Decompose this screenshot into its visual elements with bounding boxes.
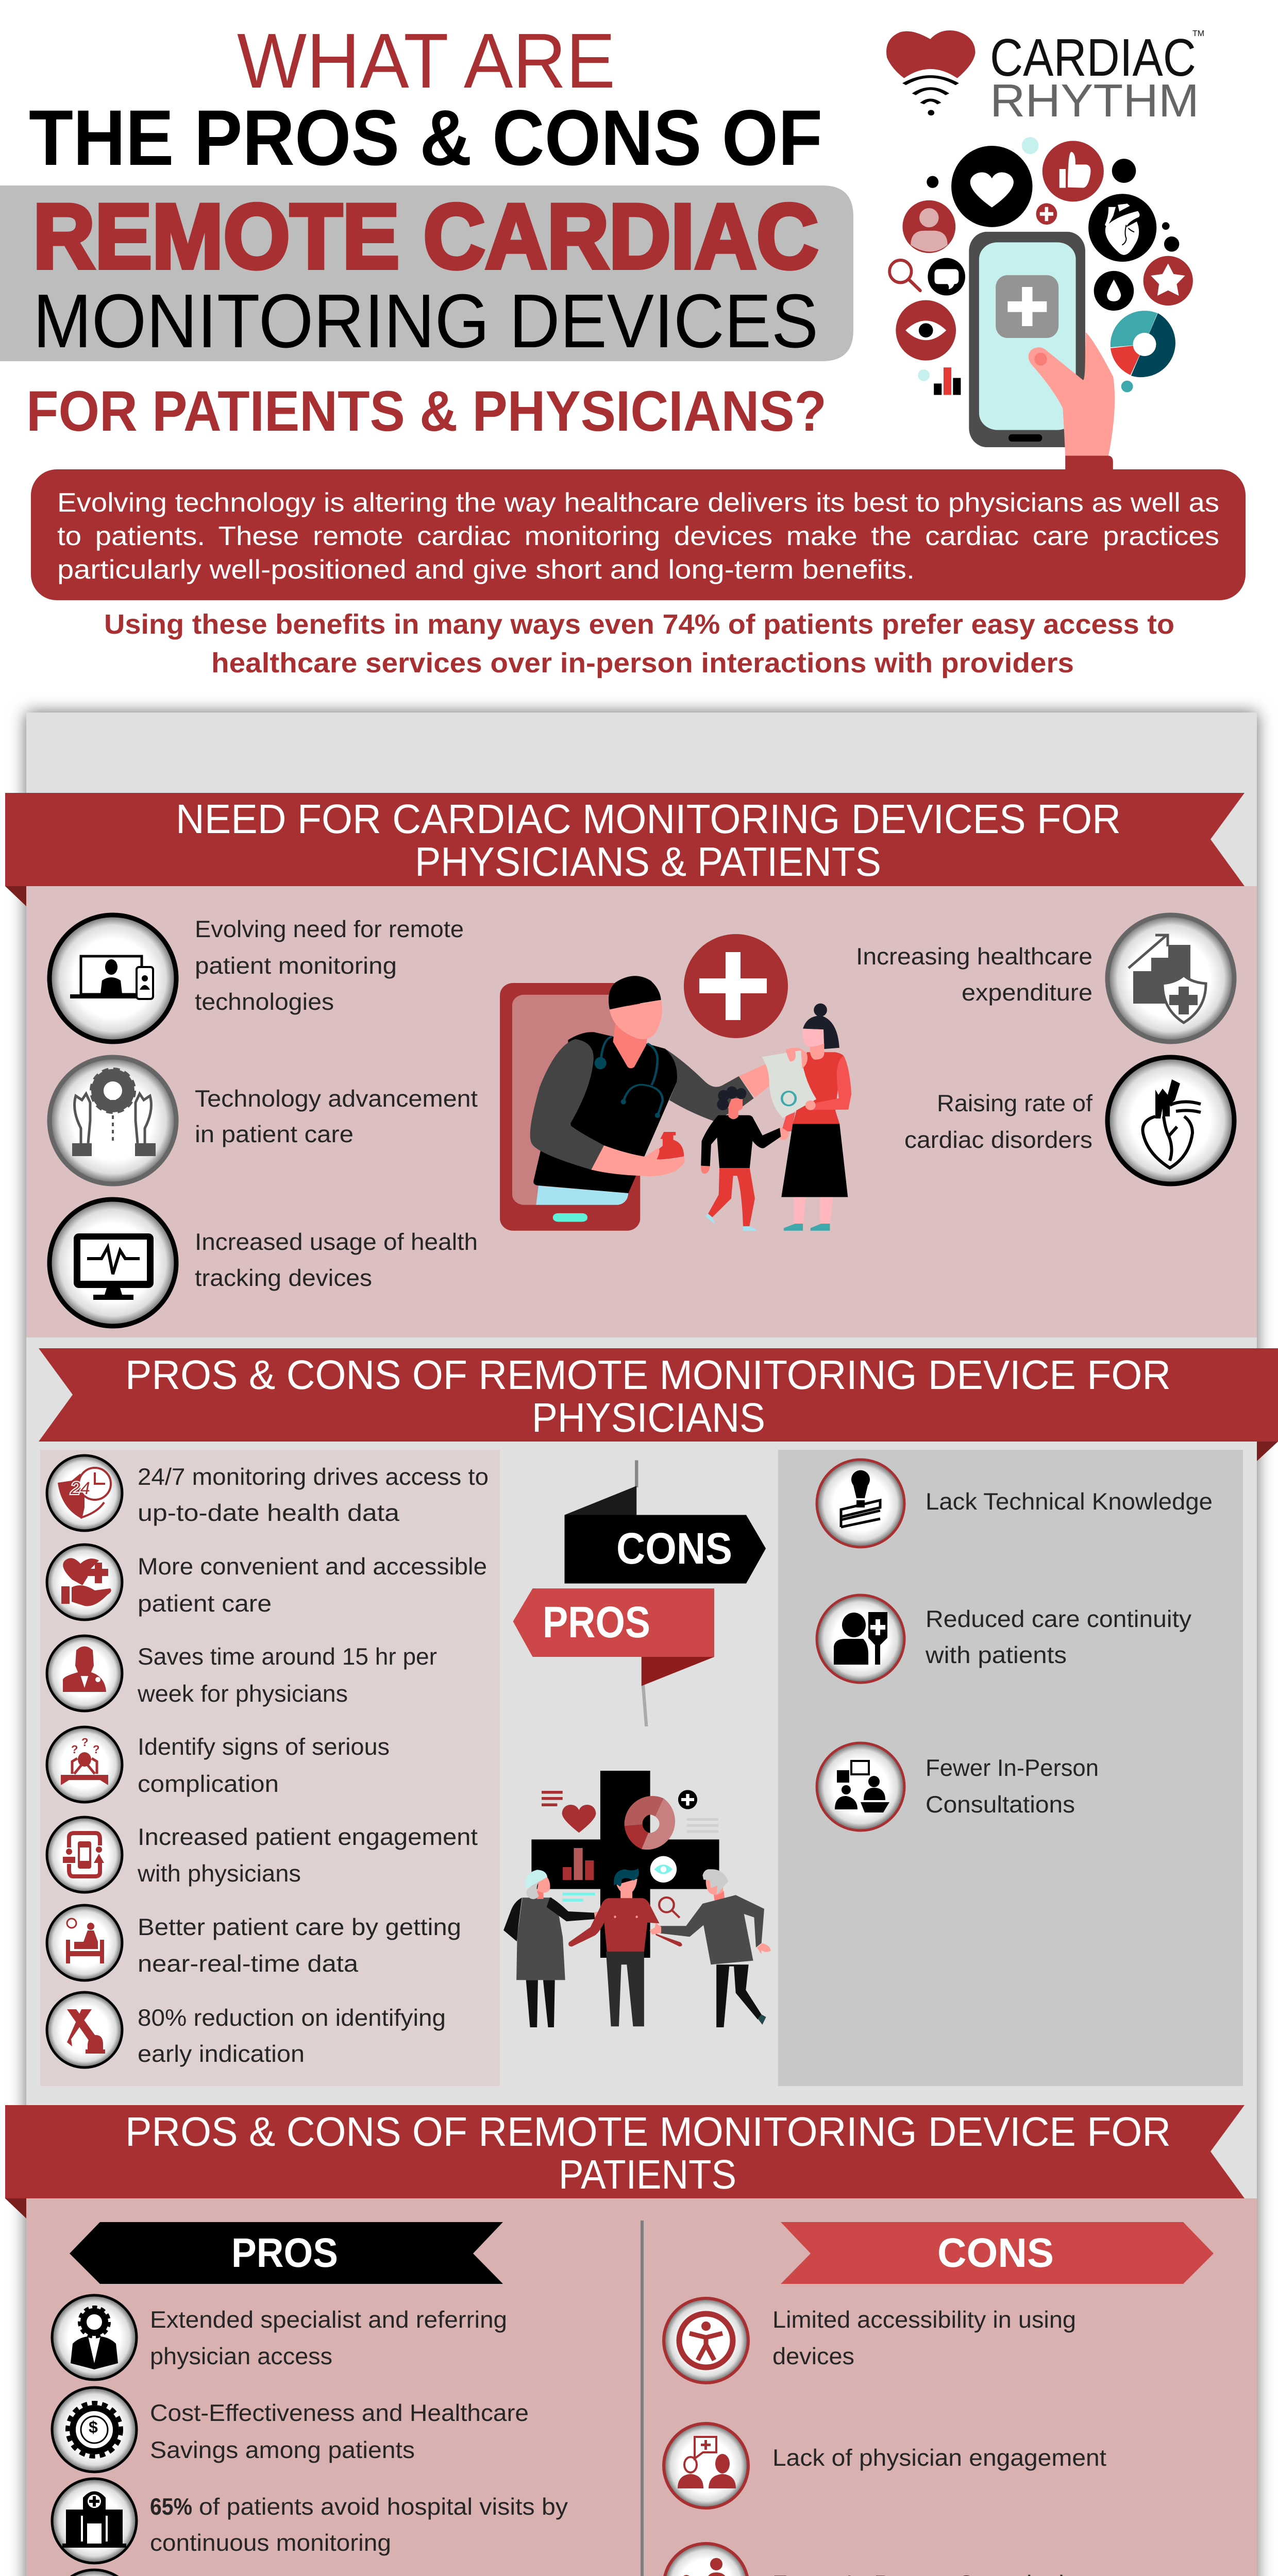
pro: early indication: 80% reduction on identifying <box>138 2004 446 2031</box>
patient con: limited accessibility: Limited accessibility in using <box>772 2306 1076 2333</box>
section banner: patients: PROS & CONS OF REMOTE MONITORING DEVICE FOR <box>125 2109 1171 2155</box>
need item: remote monitoring <box>49 915 464 1042</box>
arrow sign: cons and pros: CONS <box>616 1524 732 1573</box>
pro: near-real-time data: Better patient care by getting <box>138 1913 461 1940</box>
pro: 24/7 monitoring: 24/7 monitoring drives access to <box>138 1463 489 1490</box>
patient con: fewer in-person consultations <box>664 2544 1103 2576</box>
section banner: physicians <box>39 1348 1278 1461</box>
pro: near-real-time data <box>47 1905 461 1980</box>
section banner: need <box>5 793 1245 906</box>
patient pro: cost-effectiveness: $ <box>89 2418 98 2436</box>
patient pro: cost-effectiveness: Savings among patients <box>150 2436 415 2463</box>
con: reduced care continuity: Reduced care continuity <box>926 1605 1191 1632</box>
con: lack technical knowledge <box>817 1460 1213 1547</box>
logo: Cardiac Rhythm: RHYTHM <box>990 75 1199 127</box>
panel: need for cardiac monitoring devices <box>5 793 1257 1337</box>
cons ribbon: CONS <box>937 2230 1054 2276</box>
title: MONITORING DEVICES <box>33 279 818 364</box>
patient con: lack of physician engagement <box>664 2424 1106 2508</box>
intro panel <box>31 469 1246 600</box>
section banner: physicians: PROS & CONS OF REMOTE MONITORING DEVICE FOR <box>125 1352 1171 1398</box>
section banner: need: NEED FOR CARDIAC MONITORING DEVICES FOR <box>176 796 1121 842</box>
pro: near-real-time data: near-real-time data <box>138 1950 358 1977</box>
pro: saves time: Saves time around 15 hr per <box>138 1643 437 1670</box>
pros ribbon <box>70 2222 503 2284</box>
con: fewer in-person consultations: Consultations <box>926 1791 1075 1818</box>
pro: patient engagement: with physicians <box>137 1860 301 1887</box>
pro: patient engagement: Increased patient engagement <box>138 1823 478 1850</box>
con: lack technical knowledge: Lack Technical Knowledge <box>926 1488 1213 1515</box>
need item: healthcare expenditure: Increasing healthcare <box>856 943 1092 970</box>
con: fewer in-person consultations <box>817 1743 1099 1831</box>
con: fewer in-person consultations: Fewer In-Person <box>926 1754 1099 1781</box>
pro: signs of complication: ? <box>71 1743 78 1756</box>
intro panel: to patients. These remote cardiac monitoring devices make the cardiac care practices <box>57 521 1219 551</box>
key statistic callout: Using these benefits in many ways even 74% of patients prefer easy access to <box>104 609 1174 640</box>
intro panel: particularly well-positioned and give short and long-term benefits. <box>57 555 915 585</box>
pros ribbon: PROS <box>231 2230 338 2276</box>
need item: health tracking devices: tracking devices <box>195 1264 372 1291</box>
section banner: physicians: PHYSICIANS <box>532 1395 765 1440</box>
key statistic callout: healthcare services over in-person interactions with providers <box>211 648 1074 679</box>
pro: convenient care: More convenient and accessible <box>138 1553 487 1580</box>
need item: technology advancement: in patient care <box>195 1121 354 1147</box>
need item: remote monitoring: Evolving need for remote <box>195 916 464 942</box>
patient pro: avoid hospital visits: continuous monitoring <box>150 2529 391 2556</box>
pro: signs of complication: Identify signs of serious <box>138 1733 390 1760</box>
arrow sign: cons and pros: PROS <box>543 1598 650 1647</box>
title: WHAT ARE <box>237 17 615 104</box>
patient pro: avoid hospital visits <box>52 2479 568 2563</box>
panel: physician cons <box>778 1450 1243 2086</box>
patient pro: avoid hospital visits: 65% <box>150 2493 192 2520</box>
main grey panel <box>26 713 1257 2576</box>
illustration: medical cross with people <box>503 1771 771 2027</box>
pro: signs of complication <box>47 1727 390 1802</box>
section banner: patients <box>5 2105 1245 2218</box>
illustration: phone with health icons <box>889 137 1193 469</box>
need item: healthcare expenditure: expenditure <box>962 979 1092 1006</box>
need item: cardiac disorders <box>904 1057 1234 1184</box>
logo: Cardiac Rhythm <box>886 28 1204 127</box>
pro: convenient care <box>47 1545 487 1620</box>
need item: remote monitoring: patient monitoring <box>195 952 397 979</box>
patient con: limited accessibility: devices <box>772 2343 854 2369</box>
patient pro: specialist access: physician access <box>150 2343 332 2369</box>
pro: 24/7 monitoring: up-to-date health data <box>138 1499 399 1526</box>
arrow sign: cons and pros <box>513 1460 766 1726</box>
need item: health tracking devices <box>49 1199 478 1326</box>
patient con: limited accessibility <box>664 2298 1076 2383</box>
need item: technology advancement <box>49 1057 478 1184</box>
need item: remote monitoring: technologies <box>195 988 334 1015</box>
title <box>0 17 853 443</box>
title: FOR PATIENTS & PHYSICIANS? <box>26 379 827 443</box>
panel: pros and cons for patients <box>5 2105 1257 2576</box>
pro: signs of complication: complication <box>138 1770 279 1797</box>
pro: 24/7 monitoring <box>47 1455 489 1531</box>
pro: early indication: early indication <box>138 2040 305 2067</box>
illustration: doctor in phone with family <box>500 934 851 1231</box>
panel: physician pros <box>40 1450 500 2086</box>
logo: Cardiac Rhythm: CARDIAC <box>990 28 1196 87</box>
patient con: lack of physician engagement: Lack of physician engagement <box>772 2444 1106 2471</box>
patient pro: cost-effectiveness: Cost-Effectiveness and Healthcare <box>150 2399 529 2426</box>
intro panel: Evolving technology is altering the way healthcare delivers its best to physicians as well as <box>57 488 1219 518</box>
patient pro: feel in control <box>52 2570 578 2576</box>
need item: technology advancement: Technology advancement <box>195 1085 478 1112</box>
pro: saves time: week for physicians <box>137 1680 348 1707</box>
plus badge <box>684 934 788 1038</box>
pro: signs of complication: ? <box>81 1736 88 1749</box>
cons ribbon <box>781 2222 1214 2284</box>
con: reduced care continuity: with patients <box>925 1641 1067 1668</box>
need item: health tracking devices: Increased usage of health <box>195 1228 478 1255</box>
logo: Cardiac Rhythm: TM <box>1192 29 1204 38</box>
patient pro: cost-effectiveness <box>52 2387 529 2472</box>
pro: convenient care: patient care <box>138 1590 272 1617</box>
section banner: patients: PATIENTS <box>559 2151 736 2197</box>
pro: saves time <box>47 1636 437 1711</box>
patient pro: specialist access: Extended specialist and referring <box>150 2306 507 2333</box>
need item: cardiac disorders: cardiac disorders <box>904 1126 1092 1153</box>
pro: early indication <box>47 1992 446 2067</box>
patient pro: specialist access <box>52 2295 507 2380</box>
section banner: need: PHYSICIANS & PATIENTS <box>415 839 881 885</box>
title: THE PROS & CONS OF <box>29 94 822 182</box>
key statistic callout <box>104 609 1174 679</box>
pro: signs of complication: ? <box>93 1743 99 1756</box>
need item: healthcare expenditure <box>856 915 1234 1042</box>
title: REMOTE CARDIAC <box>33 185 818 287</box>
con: reduced care continuity <box>817 1595 1191 1683</box>
need item: cardiac disorders: Raising rate of <box>937 1090 1092 1116</box>
patient pro: avoid hospital visits: of patients avoid hospital visits by <box>199 2493 568 2520</box>
pro: patient engagement <box>47 1817 478 1892</box>
pro: 24/7 monitoring: 24 <box>70 1479 90 1498</box>
